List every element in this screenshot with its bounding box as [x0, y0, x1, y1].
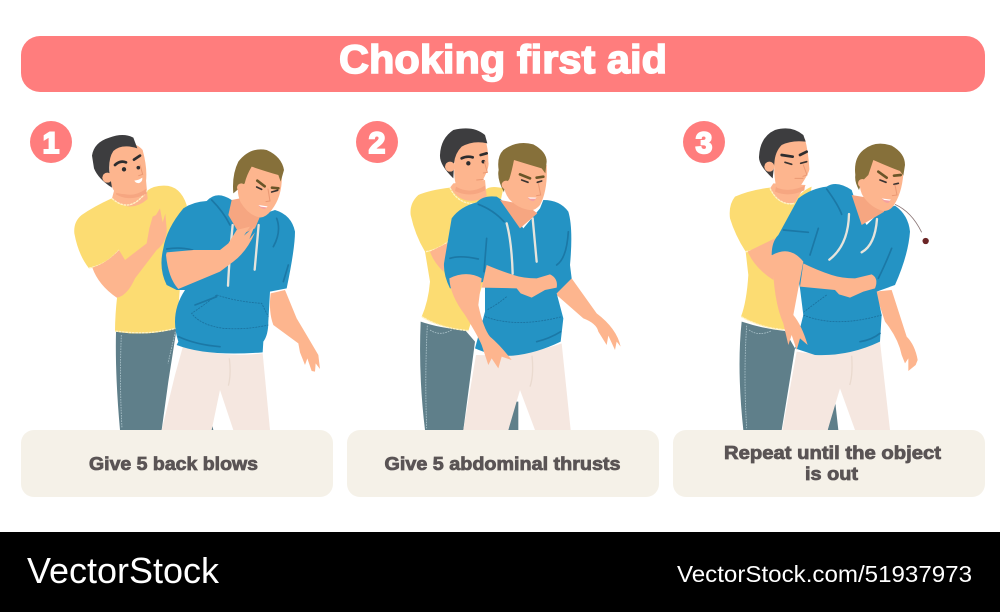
panel 3: repeat illustration — [730, 128, 929, 430]
caption box 2: Give 5 abdominal thrusts — [384, 453, 620, 474]
rescuer hand raised — [92, 208, 167, 298]
panel 1: back blows illustration — [74, 135, 320, 430]
caption box 3 — [673, 430, 985, 497]
caption box 3: Repeat until the object — [724, 442, 941, 463]
title banner — [21, 36, 985, 92]
watermark bar: VectorStock.com/51937973 — [677, 561, 972, 587]
step badge 3 — [683, 121, 725, 163]
rescuer arms and clasped hands — [482, 265, 557, 298]
victim hoodie — [161, 195, 295, 354]
victim trousers — [162, 345, 270, 430]
step badge 3: 3 — [696, 127, 712, 160]
rescuer shirt — [74, 186, 187, 334]
rescuer jeans — [420, 322, 518, 430]
victim right arm — [557, 278, 621, 350]
title: Choking first aid — [339, 38, 667, 82]
victim left arm — [449, 274, 512, 368]
victim left arm — [772, 251, 808, 350]
caption box 1: Give 5 back blows — [89, 453, 258, 474]
victim head — [228, 149, 284, 235]
rescuer arm and clasped hands — [800, 263, 876, 298]
step badge 1: 1 — [43, 127, 59, 160]
watermark bar: VectorStock — [27, 550, 220, 591]
rescuer back arm — [748, 238, 775, 280]
step badge 2: 2 — [369, 127, 385, 160]
rescuer jeans — [116, 328, 213, 430]
step badge 2 — [356, 121, 398, 163]
rescuer shirt — [410, 187, 503, 331]
rescuer head — [759, 128, 809, 204]
victim trousers — [463, 343, 571, 430]
victim head — [498, 143, 547, 228]
victim hoodie — [772, 184, 910, 355]
expelled object — [895, 204, 929, 244]
caption box 3: is out — [805, 463, 858, 484]
victim head — [852, 144, 905, 225]
victim hoodie — [444, 196, 572, 356]
watermark bar — [0, 532, 1000, 612]
victim arm with hand on chest — [166, 227, 255, 289]
step badge 1 — [30, 121, 72, 163]
rescuer jeans — [740, 322, 838, 430]
caption box 2 — [347, 430, 659, 497]
caption box 1 — [21, 430, 333, 497]
rescuer head — [92, 135, 148, 207]
victim trousers — [782, 342, 890, 430]
rescuer back arm — [430, 242, 450, 272]
panel 2: abdominal thrusts illustration — [410, 128, 621, 430]
victim hanging arm — [270, 290, 320, 372]
victim right arm — [875, 290, 918, 371]
rescuer head — [440, 128, 489, 204]
rescuer shirt — [730, 187, 812, 330]
